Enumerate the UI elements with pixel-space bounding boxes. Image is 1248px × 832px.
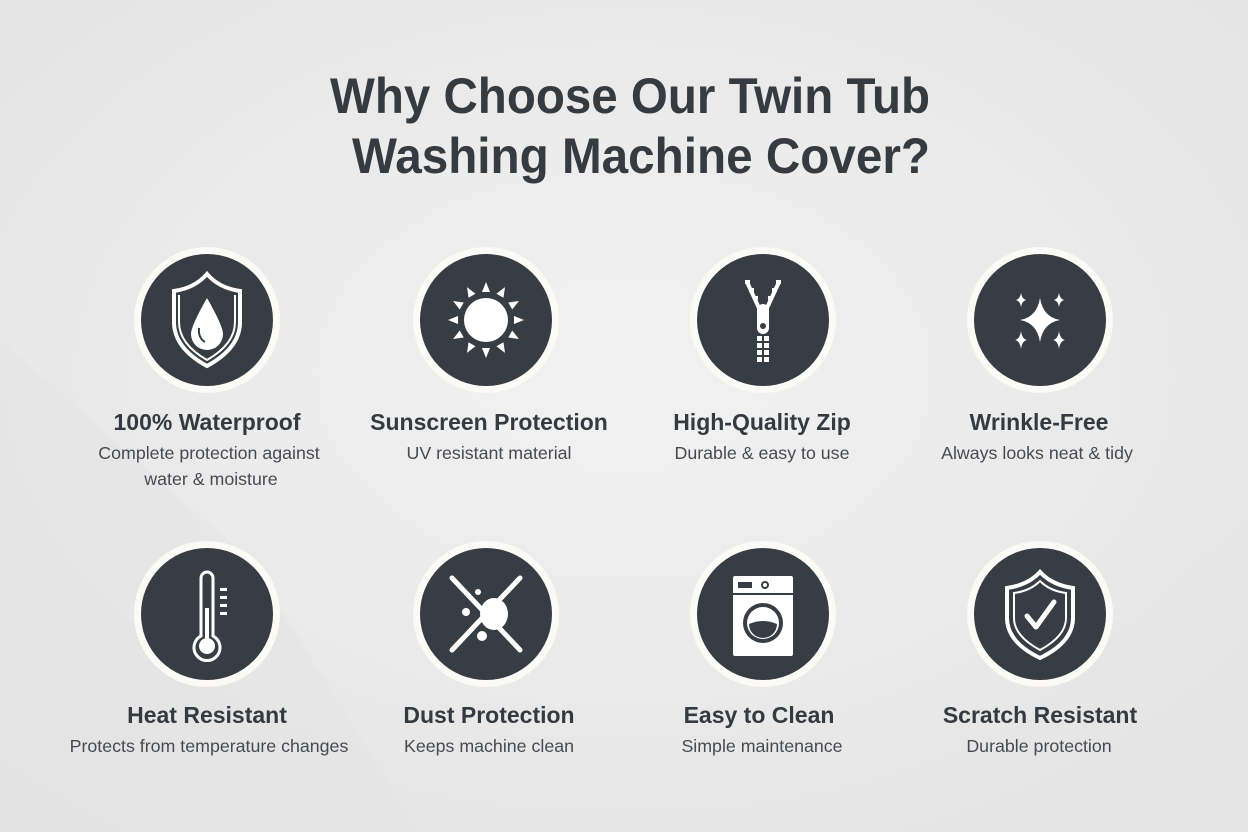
icon: sun bbox=[413, 247, 559, 393]
description: Keeps machine clean bbox=[404, 736, 574, 756]
icon: thermometer bbox=[134, 541, 280, 687]
icon: shield with water drop bbox=[134, 247, 280, 393]
description: water & moisture bbox=[143, 469, 278, 489]
icon: shield with check bbox=[967, 541, 1113, 687]
heading: Heat Resistant bbox=[127, 702, 287, 728]
icon: sparkles bbox=[967, 247, 1113, 393]
icon: washing machine bbox=[690, 541, 836, 687]
feature: Heat Resistant bbox=[70, 541, 348, 756]
title bbox=[330, 68, 930, 184]
icon: zipper bbox=[690, 247, 836, 393]
description: Protects from temperature changes bbox=[70, 736, 348, 756]
icon: crossed dust bbox=[413, 541, 559, 687]
feature: Sunscreen Protection bbox=[370, 247, 608, 463]
description: UV resistant material bbox=[406, 443, 572, 463]
description: Complete protection against bbox=[98, 443, 320, 463]
description: Durable protection bbox=[966, 736, 1112, 756]
heading: Scratch Resistant bbox=[943, 702, 1137, 728]
heading: 100% Waterproof bbox=[113, 409, 301, 435]
heading: Wrinkle-Free bbox=[970, 409, 1108, 435]
description bbox=[98, 443, 320, 489]
feature: 100% Waterproof bbox=[98, 247, 320, 489]
title: Why Choose Our Twin Tub bbox=[330, 68, 930, 124]
heading: Sunscreen Protection bbox=[370, 409, 608, 435]
heading: Easy to Clean bbox=[684, 702, 834, 728]
description: Simple maintenance bbox=[681, 736, 843, 756]
feature: High-Quality Zip bbox=[673, 247, 851, 463]
title: Washing Machine Cover? bbox=[352, 128, 930, 184]
feature: Wrinkle-Free bbox=[941, 247, 1133, 463]
description: Always looks neat & tidy bbox=[941, 443, 1133, 463]
feature: Scratch Resistant bbox=[943, 541, 1137, 756]
heading: Dust Protection bbox=[403, 702, 575, 728]
heading: High-Quality Zip bbox=[673, 409, 851, 435]
description: Durable & easy to use bbox=[675, 443, 850, 463]
feature: Easy to Clean bbox=[681, 541, 843, 756]
feature: Dust Protection bbox=[403, 541, 575, 756]
